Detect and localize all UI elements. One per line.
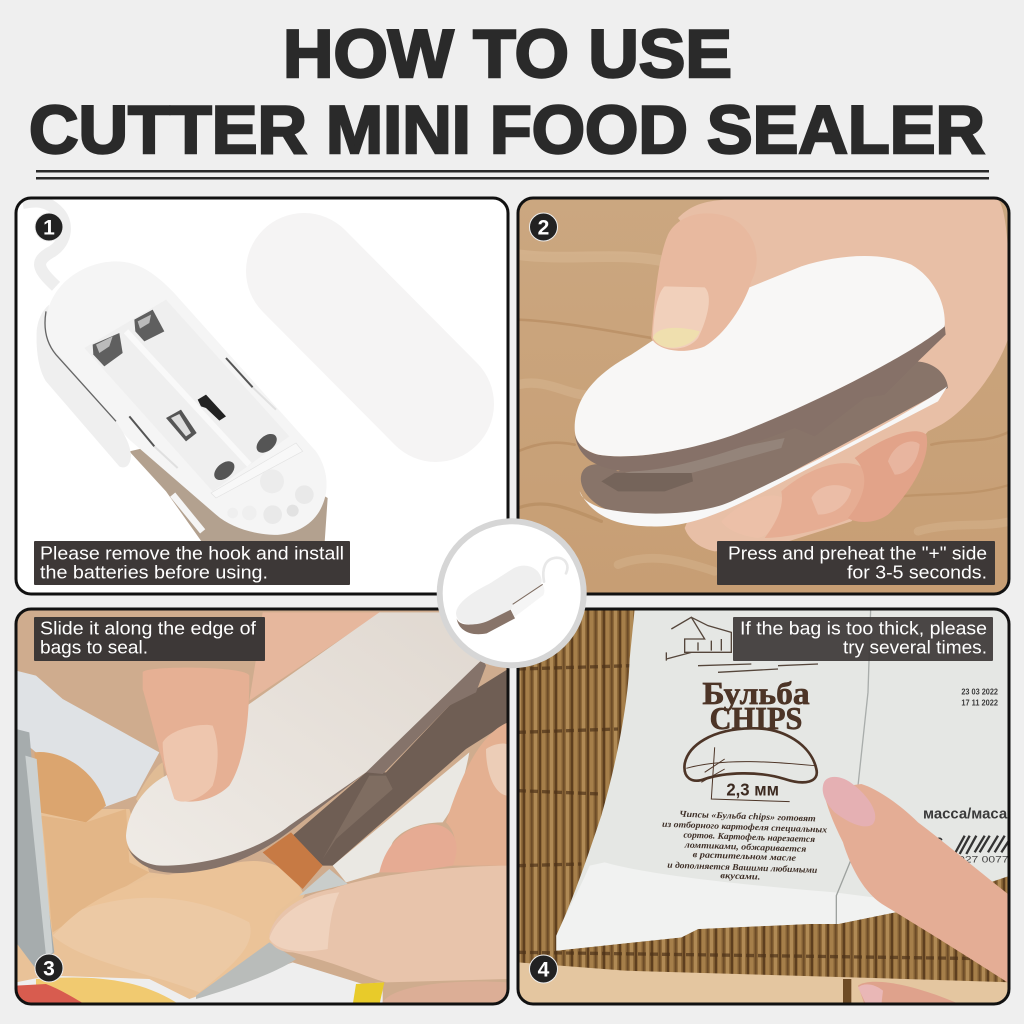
chip bag: 1027 0077 <box>951 854 1009 864</box>
caption 1: the batteries before using. <box>40 562 268 582</box>
chip bag: масса/маса/ <box>923 806 1011 822</box>
step number 1: 1 <box>43 216 55 240</box>
caption 4: try several times. <box>843 638 987 658</box>
caption 3: bags to seal. <box>40 638 148 658</box>
caption 3 <box>34 617 265 661</box>
chip diagram <box>684 728 817 802</box>
caption 1: Please remove the hook and install <box>40 544 344 564</box>
date codes <box>962 688 998 706</box>
thumb on sealer <box>143 668 249 802</box>
description text: в растительном масле <box>693 849 796 863</box>
chip bag: CHIPS <box>710 700 802 736</box>
chip bag: 2,3 мм <box>726 780 779 800</box>
bag bottom print <box>16 962 383 1005</box>
barcode <box>955 836 1010 854</box>
hand behind device <box>678 200 1010 551</box>
description text: и дополняется Вашими любимыми <box>667 860 817 875</box>
wood grain <box>518 255 1010 571</box>
description text <box>660 808 828 884</box>
panel 1: remove hook and install batteries <box>16 198 508 594</box>
date codes: 23 03 2022 <box>961 686 998 696</box>
description text: из отборного картофеля специальных <box>662 819 828 835</box>
description text: сортов. Картофель нарезается <box>683 830 816 844</box>
icon: sealer sliding <box>126 612 508 889</box>
brand text: Бульба <box>702 675 810 711</box>
caption 2 <box>717 541 995 585</box>
description text: Чипсы «Бульба chips» готовят <box>679 809 816 823</box>
center product badge <box>440 521 584 665</box>
caption 2: Press and preheat the "+" side <box>728 544 987 564</box>
step number 4 <box>530 955 558 983</box>
step number 2 <box>530 213 558 241</box>
caption 3: Slide it along the edge of <box>40 618 257 638</box>
caption 1 <box>34 541 350 585</box>
title: CUTTER MINI FOOD SEALER <box>29 92 985 168</box>
house sketch <box>666 617 818 672</box>
panel 3: slide along the bag edge <box>16 609 508 1005</box>
caption 4: If the bag is too thick, please <box>740 618 987 638</box>
title: HOW TO USE <box>283 16 732 92</box>
step number 1 <box>35 213 63 241</box>
finger <box>823 784 1010 984</box>
caption 2: for 3-5 seconds. <box>847 562 987 582</box>
step number 3 <box>35 954 63 982</box>
icon: sealer closed <box>575 256 948 526</box>
chip bag <box>556 609 1011 951</box>
description text: вкусами. <box>720 870 761 882</box>
icon: sealer cover <box>304 271 436 404</box>
thumb <box>651 221 750 351</box>
panel 4: thick bag <box>518 609 1011 1005</box>
fingers <box>721 496 783 538</box>
step number 3: 3 <box>43 958 55 980</box>
description text: ломтиками, обжаривается <box>684 840 807 854</box>
title <box>29 16 985 168</box>
upper hand <box>249 612 381 701</box>
bamboo mat <box>518 609 1010 982</box>
chip bag <box>16 671 159 809</box>
panel 2: press and preheat <box>518 198 1010 594</box>
icon: product sealer with hook <box>456 558 567 634</box>
icon: sealer body with battery bay <box>23 201 328 571</box>
step number 2: 2 <box>538 216 549 240</box>
fingers <box>446 722 508 866</box>
step number 4: 4 <box>538 958 550 982</box>
chip bag: ЕАС <box>920 834 943 849</box>
date codes: 17 11 2022 <box>961 698 998 708</box>
caption 4 <box>733 617 993 661</box>
